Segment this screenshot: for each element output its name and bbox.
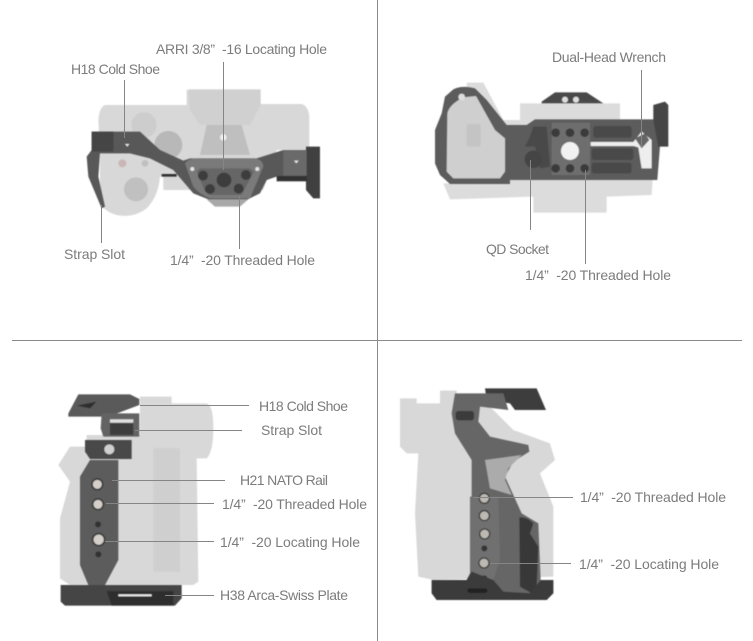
panel: right side view — [400, 388, 726, 600]
cage left side — [61, 394, 182, 606]
leader lines — [105, 406, 249, 596]
panel: bottom view — [435, 49, 671, 283]
label: locating hole: 1/4” -20 Locating Hole — [220, 534, 360, 550]
label: ARRI locating hole: ARRI 3/8” -16 Locating Hole — [156, 41, 327, 57]
label: H18 cold shoe: H18 Cold Shoe — [259, 398, 348, 414]
leader lines — [530, 70, 642, 264]
camera body bottom (ghosted) — [443, 83, 657, 213]
label: locating hole: 1/4” -20 Locating Hole — [579, 556, 719, 572]
cage bottom plate — [435, 87, 668, 184]
label: strap slot: Strap Slot — [261, 422, 322, 438]
label: strap slot: Strap Slot — [64, 246, 125, 262]
cage top plate — [87, 132, 320, 208]
leader lines — [102, 62, 240, 249]
panel: top view — [64, 41, 327, 268]
label: threaded hole: 1/4” -20 Threaded Hole — [170, 252, 315, 268]
label: threaded hole: 1/4” -20 Threaded Hole — [222, 496, 367, 512]
label: H18 cold shoe: H18 Cold Shoe — [71, 61, 160, 77]
camera body left side (ghosted) — [58, 397, 213, 585]
label: QD socket: QD Socket — [486, 241, 549, 257]
label: H21 NATO rail: H21 NATO Rail — [240, 472, 328, 488]
label: dual-head wrench: Dual-Head Wrench — [552, 49, 666, 65]
label: threaded hole: 1/4” -20 Threaded Hole — [525, 267, 671, 283]
camera body top (ghosted) — [98, 89, 309, 216]
label: threaded hole: 1/4” -20 Threaded Hole — [580, 489, 726, 505]
panel: left side view — [58, 394, 367, 606]
camera body right side (ghosted) — [400, 391, 555, 580]
leader lines — [473, 498, 573, 564]
label: arca-swiss plate: H38 Arca-Swiss Plate — [220, 587, 348, 603]
cage right side — [432, 388, 553, 600]
